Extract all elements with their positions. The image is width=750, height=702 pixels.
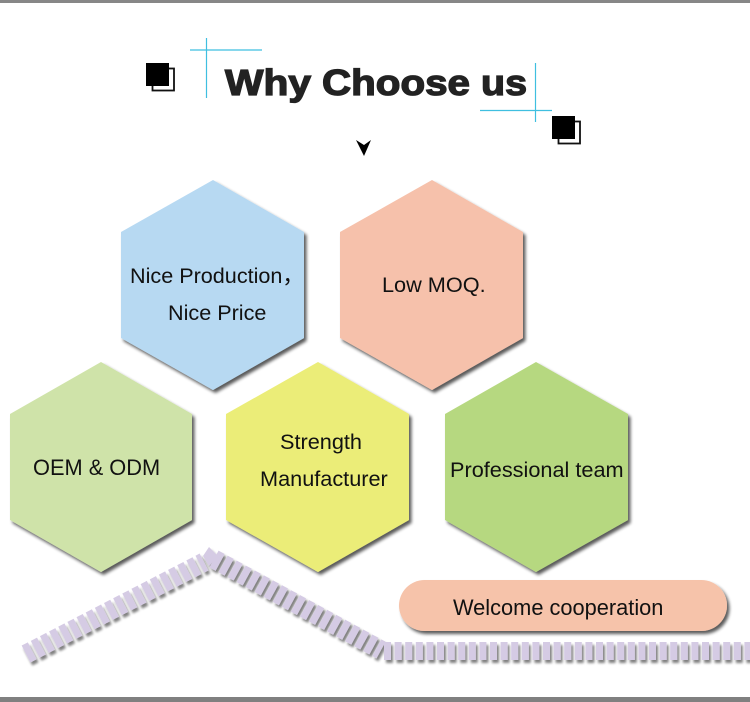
hexagon: Professional team: Professional team xyxy=(450,457,624,482)
hexagon: Strength Manufacturer: Strength xyxy=(280,429,362,454)
bottom bar xyxy=(0,697,750,702)
icon: left overlapping squares xyxy=(146,63,174,90)
icon: right overlapping squares xyxy=(552,116,580,144)
heading: us xyxy=(481,62,527,103)
pill: Welcome cooperation: Welcome cooperation xyxy=(453,595,663,620)
icon: down arrowhead xyxy=(356,140,371,156)
pill: Welcome cooperation xyxy=(399,580,727,631)
hexagon: Low MOQ. xyxy=(340,180,523,390)
heading: Choose xyxy=(322,62,470,103)
hexagon: Strength Manufacturer xyxy=(226,362,409,572)
hexagon: Strength Manufacturer: Manufacturer xyxy=(260,466,388,491)
top bar xyxy=(0,0,750,3)
hexagon: Nice Production, Nice Price: Nice Price xyxy=(168,300,266,325)
title group xyxy=(146,38,580,144)
crosshair: right xyxy=(480,63,552,122)
hexagon: Nice Production, Nice Price: Nice Production， xyxy=(130,263,304,288)
hexagon: OEM & ODM xyxy=(10,362,192,572)
hexagon: OEM & ODM: OEM & ODM xyxy=(33,455,160,480)
heading xyxy=(225,62,527,103)
hexagon: Nice Production, Nice Price xyxy=(121,180,304,390)
hexagon: Low MOQ.: Low MOQ. xyxy=(382,272,486,297)
heading: Why xyxy=(225,62,311,103)
crosshair: left xyxy=(190,38,262,98)
spring: zigzag coil xyxy=(26,547,750,654)
hexagon: Professional team xyxy=(445,362,628,572)
